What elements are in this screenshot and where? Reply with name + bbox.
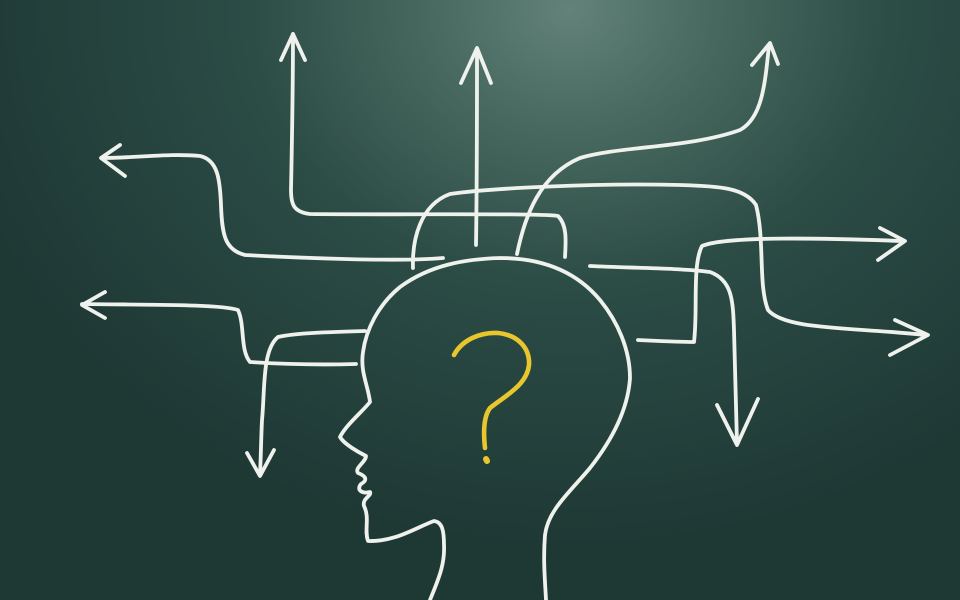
arrow: upper left bbox=[101, 145, 443, 260]
arrow: up centre bbox=[461, 48, 491, 245]
arrow: middle left bbox=[82, 292, 356, 364]
head outline bbox=[340, 258, 630, 600]
arrow: up left bbox=[281, 34, 566, 257]
arrow: far right upper bbox=[638, 228, 905, 342]
arrow: down right bbox=[590, 266, 758, 445]
question mark icon bbox=[454, 333, 529, 461]
arrow: up right bbox=[517, 43, 778, 254]
arrow: far right lower bbox=[413, 185, 928, 355]
arrow: down left bbox=[247, 331, 365, 476]
